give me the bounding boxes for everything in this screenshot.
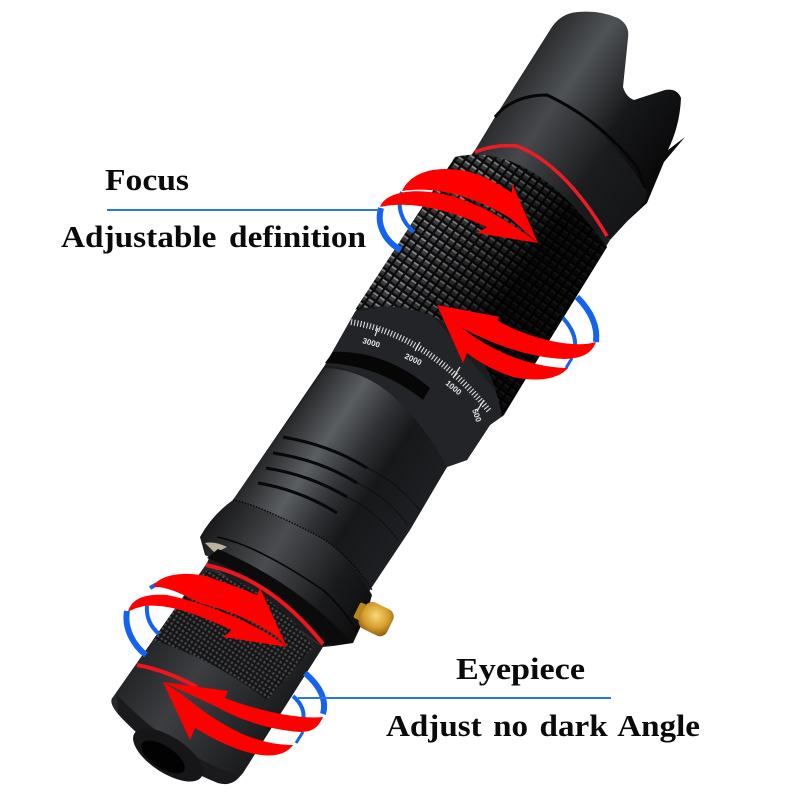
barrel base silhouette [207, 150, 610, 647]
eyepiece knurled grip [153, 570, 313, 700]
gold thumb screw [350, 597, 396, 639]
main tube and ribs [233, 368, 447, 590]
blue rotation arcs: eyepiece [126, 584, 324, 743]
blue pointer line: focus [107, 209, 379, 211]
blue rotation arcs: focus [380, 192, 596, 368]
scale ring: 3000 [361, 336, 382, 350]
lens hood [475, 12, 685, 237]
red arrows: focus bottom [437, 305, 596, 380]
label: Adjustable definition: Adjustable definition [61, 219, 366, 254]
label: Adjust no dark Angle: Adjust no dark Angle [386, 708, 700, 743]
adjustment ring [200, 500, 372, 646]
scale ring: 1000 [444, 379, 464, 397]
red arrows: eyepiece top [128, 574, 287, 647]
hood groove [495, 95, 645, 188]
upper tube [474, 95, 647, 240]
label: Eyepiece: Eyepiece [456, 651, 585, 686]
blue pointer line: eyepiece [298, 697, 611, 699]
red rings: eyepiece [137, 565, 323, 687]
scale ring [325, 300, 504, 467]
focus knurled grip [355, 155, 607, 417]
eyepiece opening [125, 718, 211, 792]
red arrows: eyepiece bottom [163, 682, 323, 755]
label: Focus: Focus [105, 162, 189, 197]
scale ring: 500 [470, 408, 483, 424]
scale ring: 2000 [403, 352, 424, 368]
red arrows: focus top [380, 169, 538, 243]
red ring: focus top [475, 146, 607, 236]
eyepiece body [111, 563, 323, 784]
